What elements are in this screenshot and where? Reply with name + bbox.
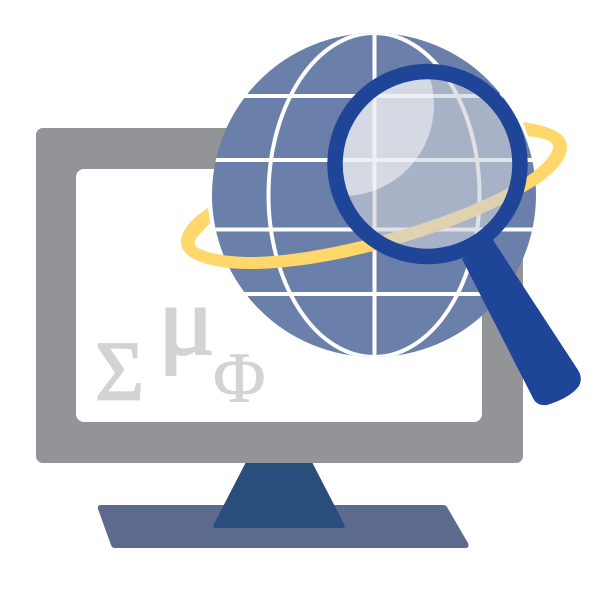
- monitor base: [98, 505, 469, 548]
- lens highlight: [342, 79, 434, 196]
- monitor stand: [213, 462, 345, 528]
- magnifier rim: [335, 72, 520, 256]
- globe: [212, 33, 536, 357]
- magnifier handle: [462, 240, 581, 405]
- yellow orbit ring: [181, 122, 567, 269]
- math symbols: [95, 267, 266, 418]
- monitor screen: [76, 169, 482, 422]
- symbol: mu: μ: [158, 267, 215, 376]
- infographic: computer with globe and magnifying glass: [36, 33, 581, 548]
- lens glass: [342, 78, 514, 250]
- monitor frame: [36, 128, 523, 463]
- symbol: phi: Φ: [213, 338, 266, 418]
- symbol: sigma: Σ: [95, 324, 144, 418]
- globe grid lines: [215, 33, 533, 357]
- magnifying glass: [327, 64, 581, 406]
